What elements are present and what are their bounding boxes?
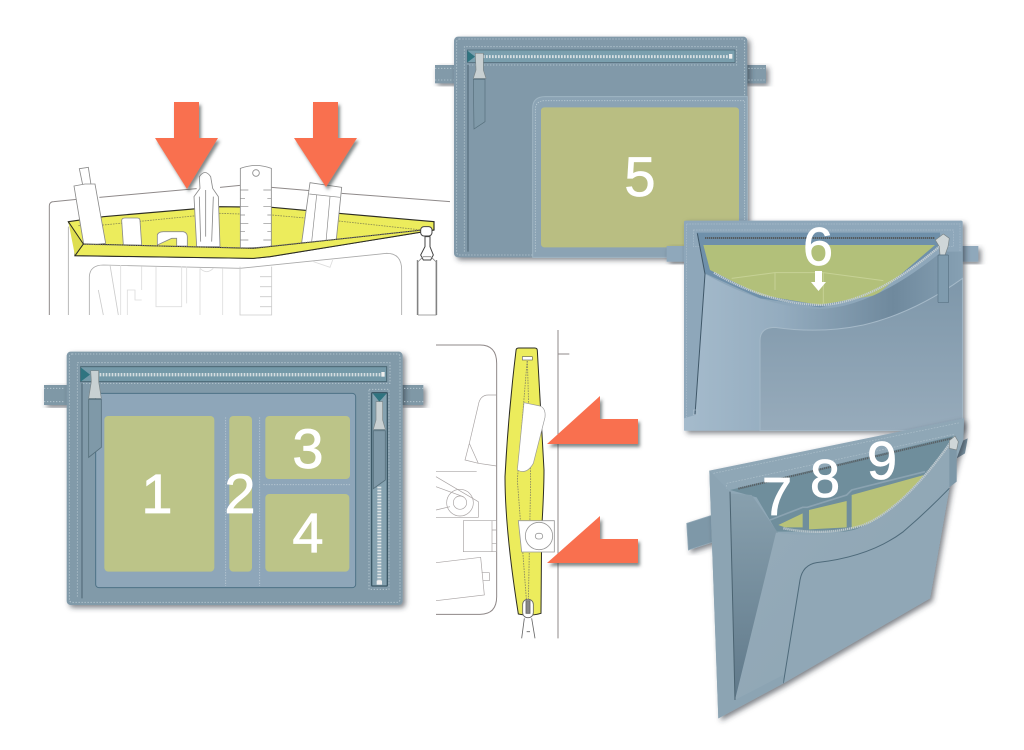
- number 9: 9: [867, 431, 897, 491]
- small down arrow: [811, 271, 826, 291]
- pocket 4: [265, 494, 349, 572]
- straps: [435, 65, 766, 83]
- top zipper: [81, 367, 387, 457]
- bottom flap: [709, 471, 783, 718]
- panel: side-view pocket illustration: [436, 330, 638, 638]
- bag body: [684, 221, 963, 431]
- number 5: 5: [624, 145, 656, 208]
- number 4: 4: [292, 501, 324, 564]
- bag body: [454, 37, 747, 257]
- top zipper: [467, 50, 735, 129]
- green interior: [703, 245, 935, 305]
- straps: [44, 385, 423, 405]
- green pocket 8: [809, 501, 847, 529]
- back panel: [709, 418, 964, 718]
- green pocket 9: [852, 475, 924, 528]
- number 3: 3: [292, 417, 324, 480]
- inner front pocket: [760, 278, 963, 431]
- panel: open pocket 6: [667, 217, 978, 431]
- zipper: [705, 238, 940, 305]
- panel: back pocket 5: [435, 37, 766, 257]
- yellow pocket back: [68, 207, 434, 258]
- zipper pull: [522, 599, 535, 638]
- zipper pull: [418, 227, 436, 315]
- front face: [684, 252, 963, 431]
- number 8: 8: [810, 449, 840, 509]
- arrow: left down: [155, 102, 218, 189]
- side gusset: [730, 493, 778, 700]
- opening: [697, 233, 941, 307]
- bag body: [67, 352, 403, 605]
- zipper pull: [949, 436, 958, 450]
- item: tape: [518, 521, 554, 552]
- arrow: upper left-pointing: [547, 396, 638, 444]
- front face: [735, 440, 951, 700]
- top zipper: [738, 438, 952, 489]
- arrow: lower left-pointing: [547, 516, 638, 563]
- zipper pull: [935, 234, 949, 303]
- number 2: 2: [224, 462, 256, 525]
- front pocket: [783, 488, 949, 683]
- yellow pocket section: [505, 348, 544, 615]
- zipper tab: [949, 443, 957, 487]
- yellow pocket front: [75, 230, 434, 258]
- line drawing: cross section: [436, 330, 569, 638]
- green pocket 7: [778, 513, 803, 527]
- pocket 3: [265, 416, 350, 479]
- right strap: [957, 438, 968, 458]
- panel: open pocket 7 to 9: [687, 418, 968, 718]
- number 7: 7: [762, 467, 792, 527]
- straps: [667, 246, 978, 262]
- number 6: 6: [803, 217, 833, 277]
- pocket 1: [104, 416, 214, 572]
- panel: top-view pen pocket illustration: [49, 102, 450, 315]
- item: card: [517, 403, 545, 471]
- arrow: right down: [294, 102, 357, 187]
- left strap: [687, 515, 714, 550]
- line drawing: folder outline: [49, 185, 450, 315]
- opening interior: [730, 436, 953, 532]
- number 1: 1: [141, 462, 173, 525]
- panel: inner pockets 1 to 4: [44, 352, 423, 605]
- front zipper: [783, 443, 950, 532]
- front pocket: [533, 97, 747, 257]
- side zipper: [372, 393, 387, 586]
- inner panel: [96, 393, 356, 588]
- items in pocket: [74, 165, 342, 248]
- green pocket area: [541, 107, 739, 247]
- pocket 2: [229, 416, 252, 572]
